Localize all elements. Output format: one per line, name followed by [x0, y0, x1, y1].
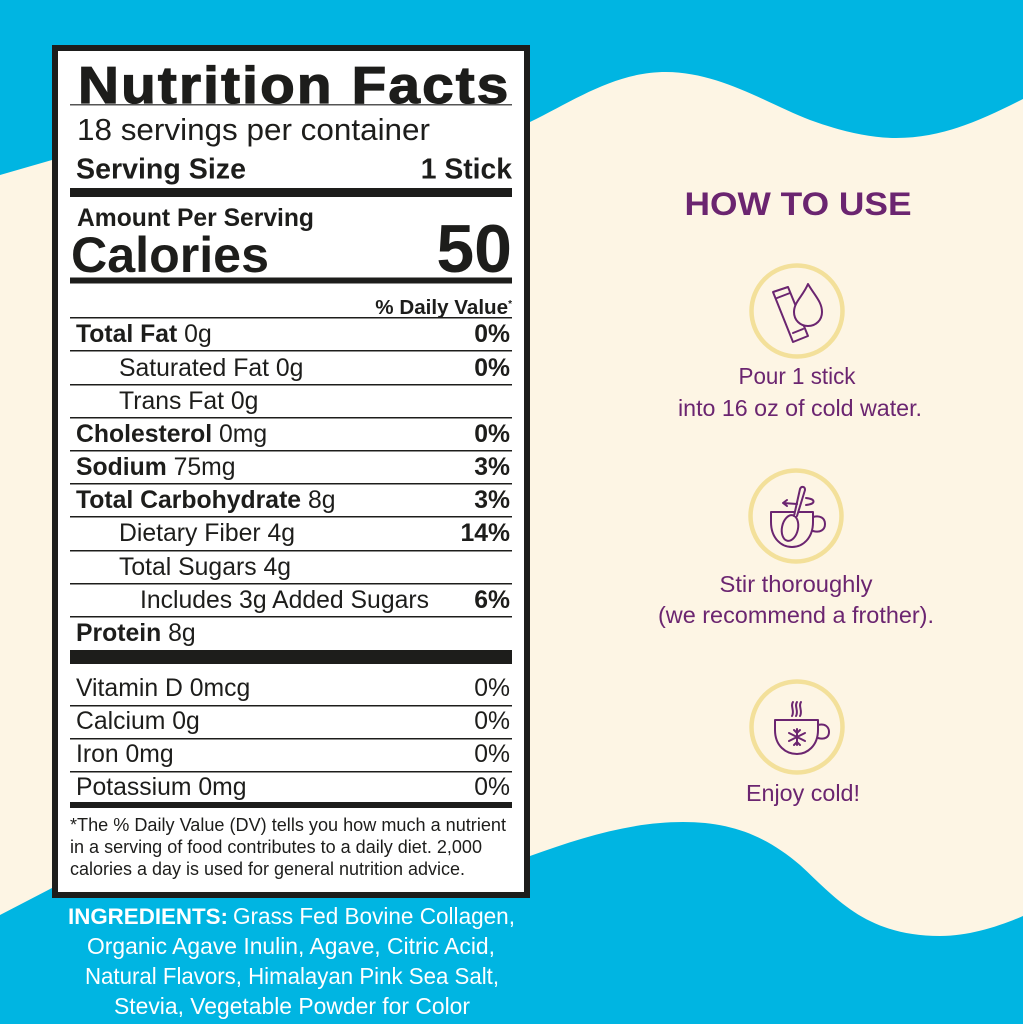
footnote: in a serving of food contributes to a daily diet. 2,000 — [70, 837, 482, 857]
panel border — [55, 48, 527, 895]
heading: Nutrition Facts: Nutrition Facts — [78, 56, 511, 114]
row: cholesterol: Cholesterol 0mg — [76, 421, 267, 448]
row: calcium — [76, 708, 510, 735]
heading: how to use: HOW TO USE — [684, 186, 912, 222]
serving size — [76, 152, 512, 184]
calories — [71, 211, 512, 287]
row: potassium: 0% — [474, 774, 510, 801]
row: iron: Iron 0mg — [76, 741, 174, 768]
row: saturated fat: 0% — [474, 355, 510, 382]
row: vitamin d — [76, 675, 510, 702]
step 1 text — [678, 363, 922, 421]
row: total fat: Total Fat 0g — [76, 321, 212, 348]
row: total sugars: Total Sugars 4g — [119, 554, 291, 581]
step 3 text: Enjoy cold! — [746, 780, 860, 806]
ingredients: Organic Agave Inulin, Agave, Citric Acid, — [87, 933, 495, 959]
row: dietary fiber: 14% — [460, 520, 510, 547]
background: top blue wave — [0, 0, 1023, 175]
ingredients: Natural Flavors, Himalayan Pink Sea Salt, — [85, 963, 499, 989]
step 1 text: into 16 oz of cold water. — [678, 395, 922, 421]
serving size: Serving Size — [76, 152, 246, 184]
row: total fat — [76, 321, 510, 348]
row: dietary fiber — [119, 520, 510, 547]
step 2 text: Stir thoroughly — [720, 571, 873, 597]
row: added sugars: 6% — [474, 587, 510, 614]
step 1 text: Pour 1 stick — [738, 363, 856, 389]
row: vitamin d: 0% — [474, 675, 510, 702]
row: added sugars: Includes 3g Added Sugars — [140, 587, 429, 614]
footnote — [70, 815, 506, 879]
calories: 50 — [436, 211, 512, 287]
background: bottom blue wave — [0, 822, 1023, 1024]
calories: Calories — [71, 227, 269, 283]
row: protein: Protein 8g — [76, 620, 196, 647]
row: total carbohydrate — [76, 487, 510, 514]
row: calcium: 0% — [474, 708, 510, 735]
panel: nutrition facts — [55, 48, 527, 895]
row: cholesterol: 0% — [474, 421, 510, 448]
row: potassium — [76, 774, 510, 801]
servings per container: 18 servings per container — [77, 112, 430, 147]
amount per serving: Amount Per Serving — [77, 205, 314, 232]
ingredients: Grass Fed Bovine Collagen, — [233, 903, 515, 929]
icon: stick and water drop — [752, 266, 842, 356]
icon: cold cup with snowflake — [752, 682, 842, 772]
row: total carbohydrate: Total Carbohydrate 8g — [76, 487, 335, 514]
row: saturated fat: Saturated Fat 0g — [119, 355, 303, 382]
row: cholesterol — [76, 421, 510, 448]
row: iron: 0% — [474, 741, 510, 768]
footnote: *The % Daily Value (DV) tells you how much a nutrient — [70, 815, 506, 835]
icon: stirring cup and spoon — [750, 470, 842, 562]
ingredients: Stevia, Vegetable Powder for Color — [114, 993, 470, 1019]
step 2 text — [658, 571, 934, 628]
daily value header: * — [508, 299, 512, 310]
footnote: calories a day is used for general nutrition advice. — [70, 859, 465, 879]
step 2 text: (we recommend a frother). — [658, 602, 934, 628]
row: sodium: Sodium 75mg — [76, 454, 236, 481]
row: sodium: 3% — [474, 454, 510, 481]
row: iron — [76, 741, 510, 768]
serving size: 1 Stick — [421, 152, 512, 184]
ingredients: INGREDIENTS: — [68, 904, 228, 929]
row: sodium — [76, 454, 510, 481]
row: potassium: Potassium 0mg — [76, 774, 247, 801]
row: trans fat: Trans Fat 0g — [119, 388, 258, 415]
row: dietary fiber: Dietary Fiber 4g — [119, 520, 295, 547]
row: saturated fat — [119, 355, 510, 382]
ingredients — [68, 903, 515, 1019]
row: vitamin d: Vitamin D 0mcg — [76, 675, 250, 702]
daily value header: % Daily Value — [375, 296, 508, 319]
row: total carbohydrate: 3% — [474, 487, 510, 514]
row: calcium: Calcium 0g — [76, 708, 200, 735]
row: total fat: 0% — [474, 321, 510, 348]
